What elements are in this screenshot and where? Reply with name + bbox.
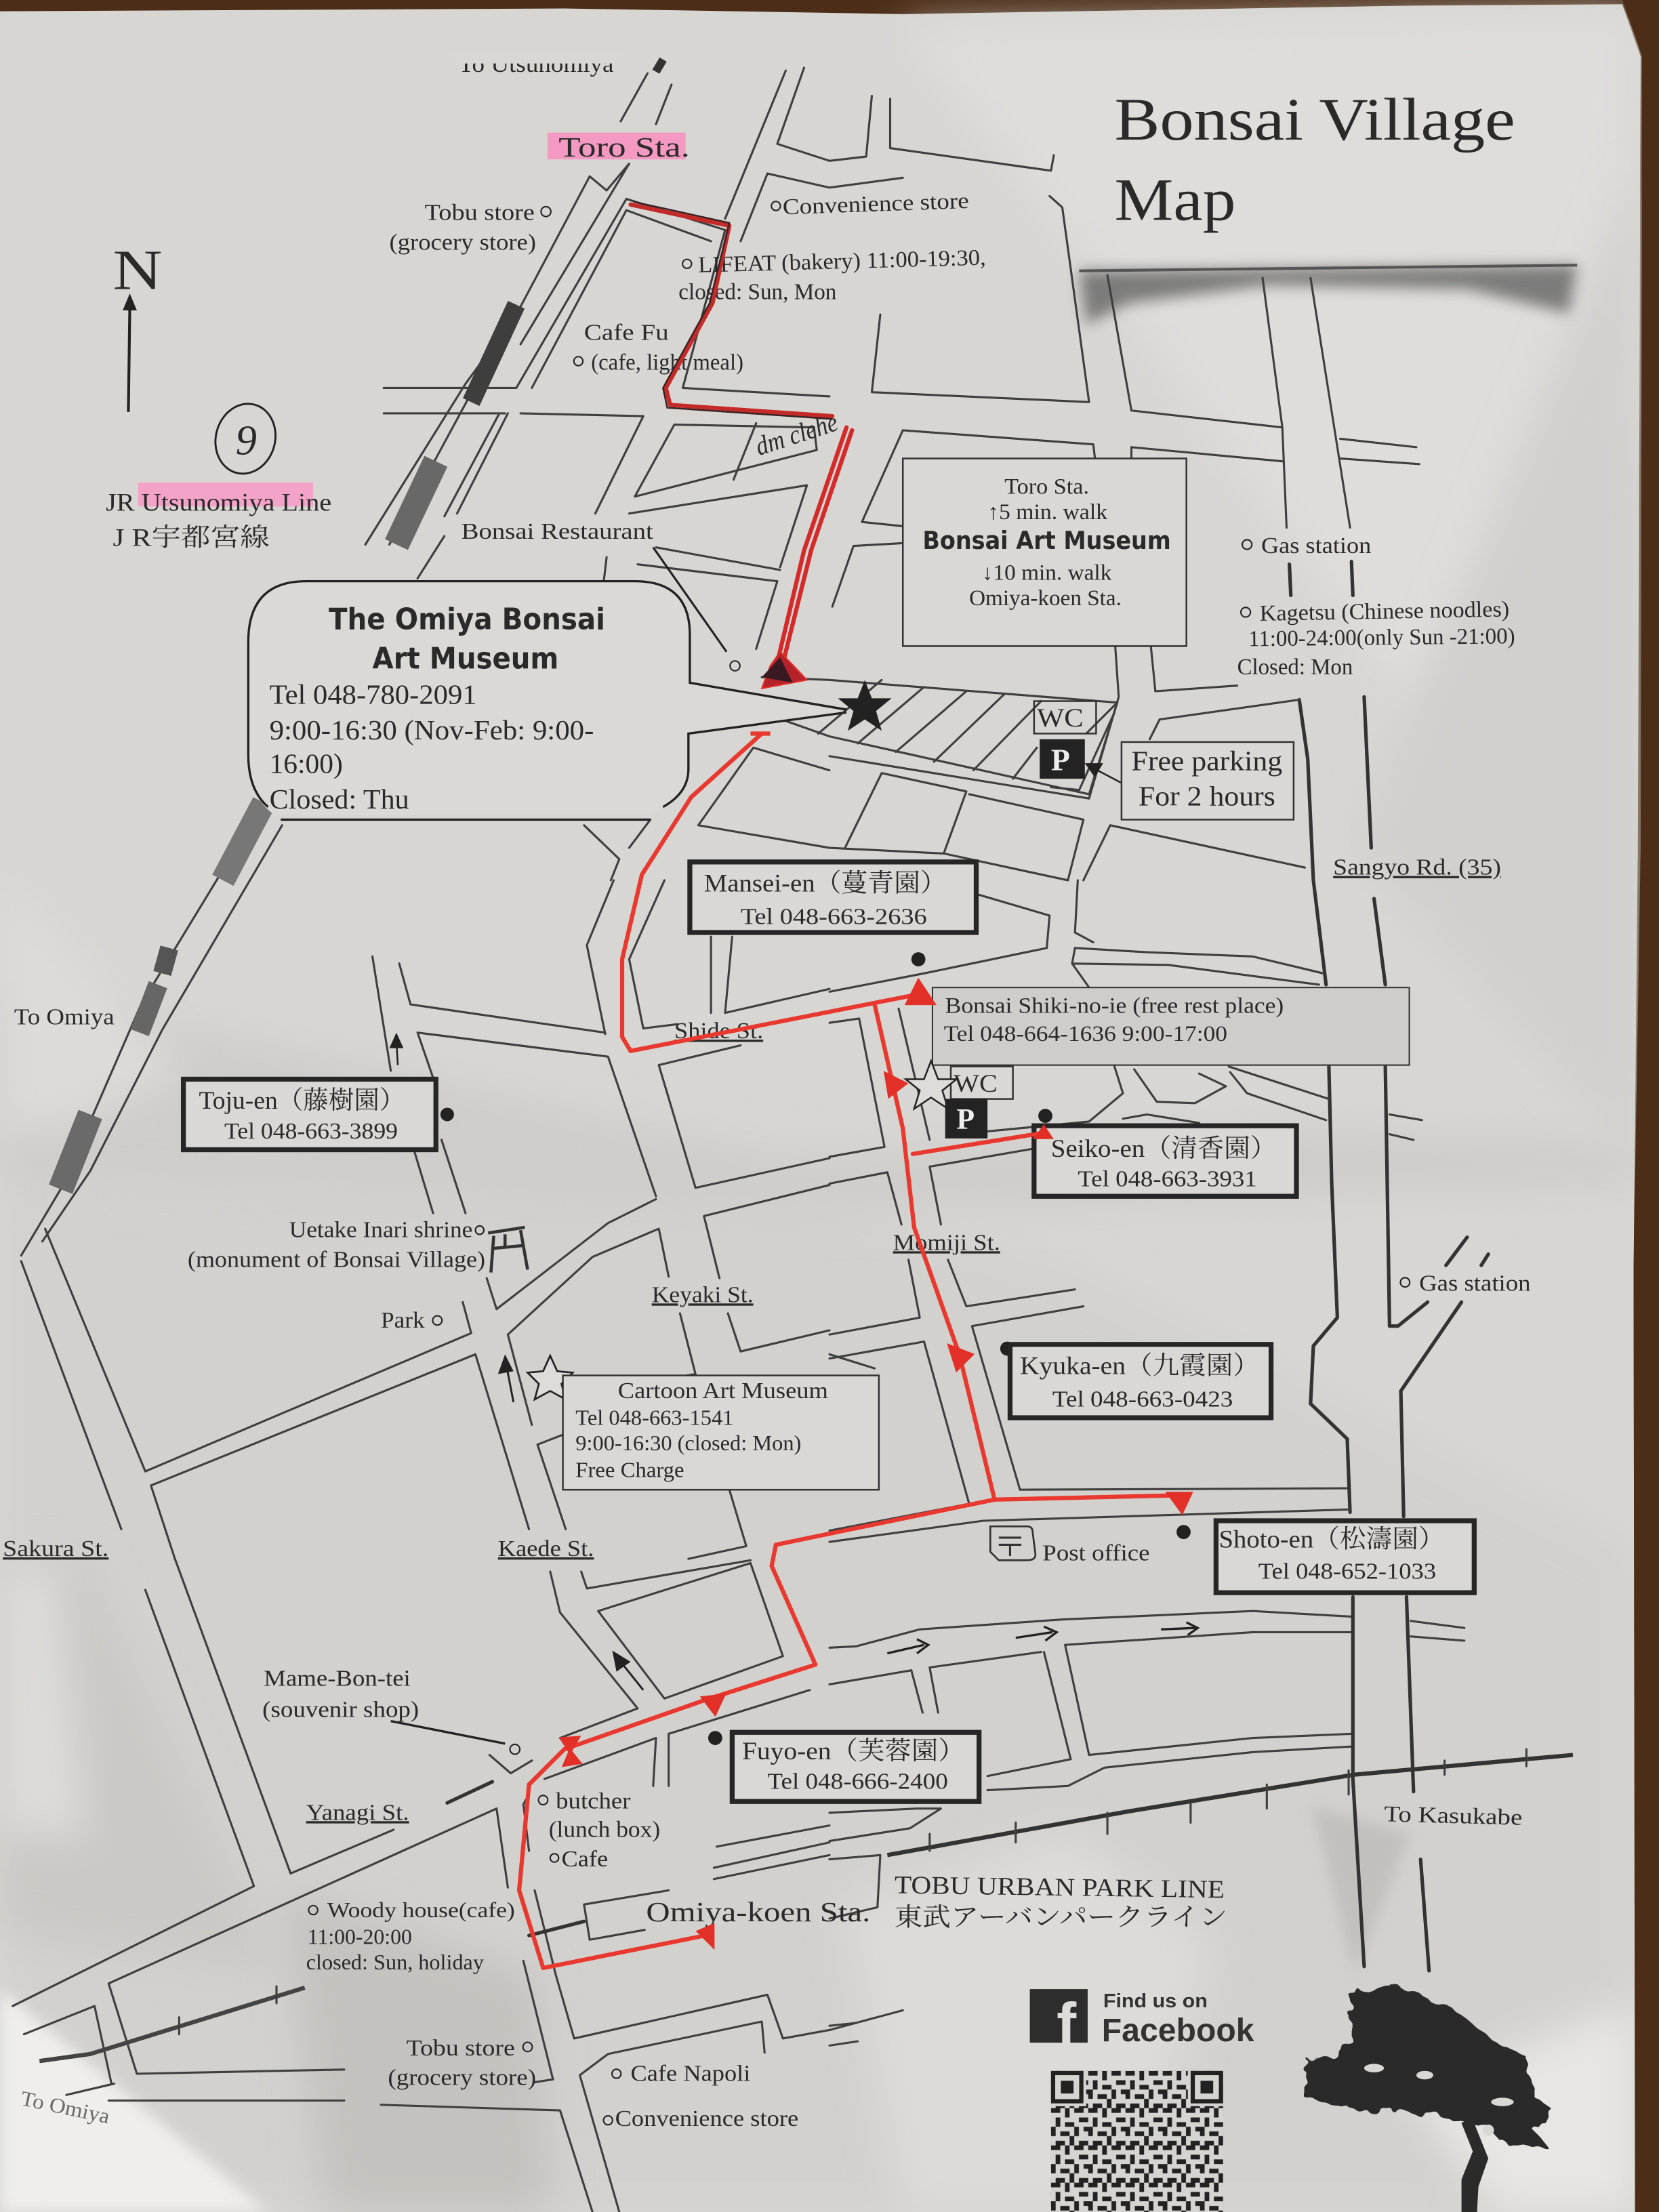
panel: Seiko-en: Seiko-en（清香園） [1051,1135,1277,1163]
Bonsai Restaurant marker [653,548,740,671]
panel: Cartoon Art Museum [563,1376,879,1490]
JR Utsunomiya line label: J R宇都宮線 [113,524,270,552]
handwritten note near the route: dm clehe [752,407,841,462]
panel: Shoto-en: Tel 048-652-1033 [1258,1559,1436,1584]
panel: Mansei-en [690,862,976,933]
panel: Omiya Bonsai Art Museum callout: Closed: Thu [270,784,409,815]
direction arrows on streets [390,1033,1197,1690]
place labels: upper area [390,188,986,544]
Tobu Urban Park Line label: 東武アーバンパークライン [895,1903,1227,1931]
panel: free parking note: For 2 hours [1139,781,1275,813]
museum grounds with hatching [762,677,1118,794]
street label: Sakura St: Sakura St. [3,1536,108,1561]
park label: Park [381,1308,425,1333]
panel: walking distance box: Toro Sta. [1004,474,1089,499]
marker: Seiko-en [1038,1109,1052,1123]
panel: Omiya Bonsai Art Museum callout: 16:00) [270,749,343,780]
panel: Cartoon Art Museum: Cartoon Art Museum [618,1378,828,1404]
To Utsunomiya label (clipped): To Utsunomiya [459,52,614,77]
JR Utsunomiya railway line [21,64,672,1256]
Tobu Urban Park Line label [895,1872,1227,1931]
Tobu Urban Park Line label: TOBU URBAN PARK LINE [895,1872,1225,1904]
Tobu store label, south: (grocery store) [388,2066,536,2091]
panel: Mansei-en: Mansei-en（蔓青園） [704,869,947,898]
panel: Shoto-en [1216,1521,1474,1593]
red walking route [519,202,1178,1968]
panel: Omiya Bonsai Art Museum callout [248,581,846,819]
street label: Kaede St: Kaede St. [498,1536,594,1561]
icon: rest place star and WC, parking: WC [954,1070,998,1098]
text: Find us on Facebook: Find us on [1103,1990,1208,2012]
text: Find us on Facebook: Facebook [1102,2013,1254,2049]
Woody house label: 11:00-20:00 [308,1925,412,1948]
icon: Facebook logo [1030,1989,1088,2057]
place labels: upper area: (cafe, light meal) [591,350,743,375]
panel: Shoto-en: Shoto-en（松濤園） [1219,1525,1445,1554]
street label: Sangyo Rd: Sangyo Rd. (35) [1333,855,1501,880]
icon: torii gate [488,1227,528,1273]
place labels: gas station and Kagetsu [1237,533,1515,680]
title: Map [1114,167,1236,234]
Toro station label: Toro Sta. [558,132,690,163]
marker: Shoto-en [1176,1525,1191,1539]
gray shaded band below title [1079,265,1577,325]
Woody house label: closed: Sun, holiday [306,1950,484,1974]
label: To Omiya, southwest: To Omiya [19,2086,112,2128]
panel: Bonsai Shiki-no-ie: Tel 048-664-1636 9:00-17:00 [944,1021,1227,1046]
place labels: gas station and Kagetsu: Kagetsu (Chinese noodles) [1259,596,1509,626]
Uetake Inari shrine label [188,1218,485,1272]
panel: free parking note [1122,742,1294,819]
north arrow [113,240,162,412]
place labels: upper area: closed: Sun, Mon [678,279,837,304]
icon: Facebook logo: f [1057,1990,1077,2057]
icon: museum star [838,680,892,731]
panel: Kyuka-en [1000,1342,1271,1418]
icon: post office [990,1526,1036,1560]
JR Utsunomiya line label: JR Utsunomiya Line [106,489,331,517]
label: To Omiya: To Omiya [14,1004,115,1029]
place labels: butcher and cafe: (lunch box) [549,1817,660,1842]
street label: Shide St: Shide St. [674,1019,763,1044]
Mame-Bon-tei label and pointer: (souvenir shop) [262,1697,419,1722]
place labels: upper area: Tobu store [425,201,535,226]
Uetake Inari shrine label: Uetake Inari shrine [289,1218,472,1243]
north arrow: N [113,240,162,302]
icon: rest place star and WC, parking [905,1061,1013,1139]
label: To Kasukabe: To Kasukabe [1384,1801,1523,1830]
place labels: upper area: Cafe Fu [584,321,669,346]
Uetake Inari shrine label: (monument of Bonsai Village) [188,1247,485,1272]
WC and parking at museum [1034,701,1122,783]
title: Bonsai Village [1114,86,1515,153]
place labels: butcher and cafe: butcher [556,1789,630,1814]
panel: Seiko-en [1034,1126,1296,1196]
Mame-Bon-tei label and pointer [262,1666,520,1755]
Mame-Bon-tei label and pointer: Mame-Bon-tei [264,1666,411,1692]
place labels: gas station and Kagetsu: Gas station [1261,533,1372,558]
marker: Mansei-en [912,952,926,966]
panel: Kyuka-en: Tel 048-663-0423 [1052,1386,1233,1412]
panel: Cartoon Art Museum: Tel 048-663-1541 [575,1406,733,1429]
panel: walking distance box: Bonsai Art Museum [922,526,1171,555]
panel: Bonsai Shiki-no-ie [933,987,1410,1065]
place labels: upper area: Convenience store [782,188,969,220]
Tobu store label, south [388,2036,536,2091]
street label: Yanagi St: Yanagi St. [306,1800,409,1825]
icon: rest place star and WC, parking: P [956,1103,975,1135]
panel: Cartoon Art Museum: 9:00-16:30 (closed: Mon) [575,1431,801,1455]
place labels: butcher and cafe: Cafe [561,1847,608,1872]
icon: bonsai tree silhouette [1305,1984,1552,2212]
panel: Bonsai Shiki-no-ie: Bonsai Shiki-no-ie (free rest place) [945,994,1284,1018]
route direction markers [560,652,1192,1948]
panel: walking distance box: ↓10 min. walk [982,560,1112,585]
place labels: upper area: Bonsai Restaurant [462,519,654,544]
panel: walking distance box: ↑5 min. walk [987,499,1108,524]
panel: Mansei-en: Tel 048-663-2636 [741,903,927,929]
street label: Keyaki St: Keyaki St. [652,1282,754,1307]
panel: walking distance box [903,459,1187,646]
panel: Seiko-en: Tel 048-663-3931 [1078,1167,1257,1192]
gas station label, east: Gas station [1419,1271,1531,1296]
panel: Kyuka-en: Kyuka-en（九霞園） [1020,1353,1260,1380]
icon: Cartoon Art Museum star [528,1355,573,1399]
panel: Cartoon Art Museum: Free Charge [575,1458,684,1481]
place labels: gas station and Kagetsu: 11:00-24:00(only Sun -21:00) [1248,623,1515,651]
Woody house label [306,1898,515,1974]
marker: Toju-en [441,1107,454,1121]
Omiya-koen station label: Omiya-koen Sta. [646,1897,870,1928]
Tobu Urban Park railway line [39,1749,1573,2061]
title [1114,86,1515,234]
panel: Omiya Bonsai Art Museum callout: Tel 048-780-2091 [270,680,477,711]
Woody house label: Woody house(cafe) [327,1898,515,1922]
place labels: butcher and cafe [539,1789,660,1872]
panel: Fuyo-en [732,1732,979,1801]
text: Find us on Facebook [1102,1990,1254,2049]
panel: Fuyo-en: Tel 048-666-2400 [767,1769,948,1795]
panel: Omiya Bonsai Art Museum callout: 9:00-16:30 (Nov-Feb: 9:00- [270,715,594,746]
Tobu store label, south: Tobu store [407,2036,515,2061]
park label [381,1308,442,1333]
WC and parking at museum: P [1051,743,1070,777]
panel: Toju-en: Toju-en（藤樹園） [199,1086,405,1115]
panel: walking distance box: Omiya-koen Sta. [969,586,1122,610]
place labels: upper area: (grocery store) [390,230,536,255]
Cafe Napoli and convenience store labels: Convenience store [615,2106,798,2131]
panel: Toju-en: Tel 048-663-3899 [224,1119,398,1144]
marker: Fuyo-en [708,1731,722,1745]
JR Utsunomiya line label [106,483,331,552]
panel: Fuyo-en: Fuyo-en（芙蓉園） [742,1737,965,1765]
QR code [1051,2071,1223,2212]
panel: Toju-en [184,1079,436,1150]
masks top of clipped label [451,51,621,64]
handwritten circled 9: 9 [236,416,257,464]
place labels: gas station and Kagetsu: Closed: Mon [1237,655,1353,680]
Cafe Napoli and convenience store labels [604,2061,798,2131]
Cafe Napoli and convenience store labels: Cafe Napoli [630,2061,750,2086]
street label: Momiji St: Momiji St. [893,1230,1000,1255]
panel: Omiya Bonsai Art Museum callout: Art Museum [373,642,558,676]
handwritten circled 9 [208,397,283,480]
panel: Omiya Bonsai Art Museum callout: The Omiya Bonsai [329,602,605,636]
WC and parking at museum: WC [1037,703,1084,733]
panel: free parking note: Free parking [1131,746,1282,777]
place labels: upper area: LIFEAT (bakery) 11:00-19:30, [698,245,986,278]
post office label: Post office [1042,1540,1150,1565]
